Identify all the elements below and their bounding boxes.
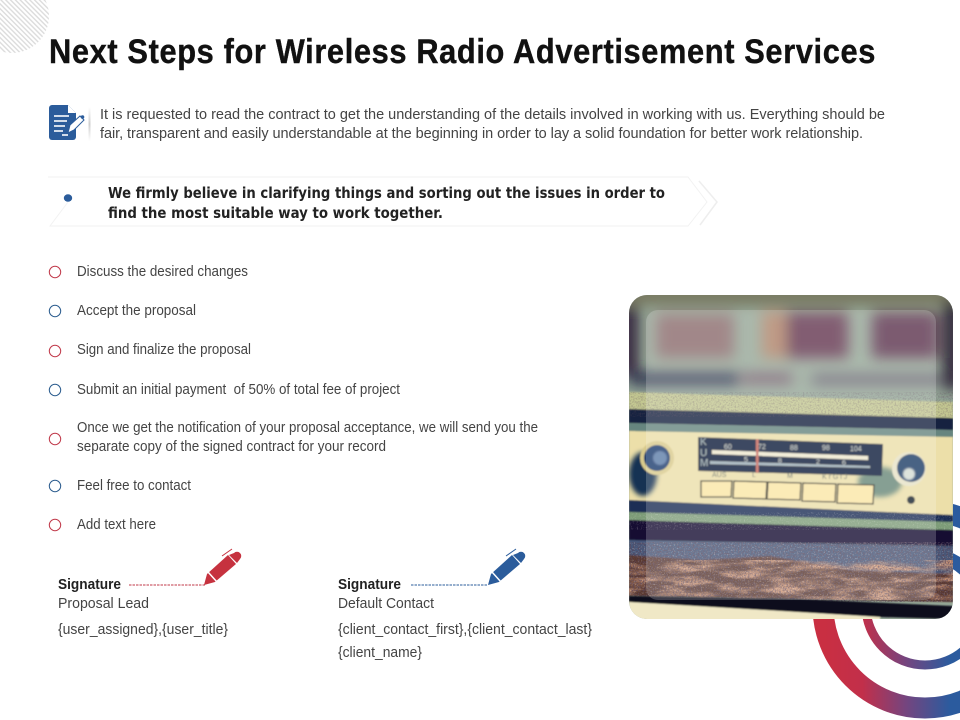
item 5: Once we get the notification of your proposal acceptance, we will send you the (77, 419, 538, 436)
tuner dial: 88 (790, 445, 798, 452)
tuner dial: 5 (744, 457, 748, 464)
callout banner (48, 177, 717, 226)
icon: blue pen (488, 549, 525, 585)
decorative hatched circle (0, 0, 49, 53)
item 4: Submit an initial payment of 50% of total fee of project (77, 381, 401, 398)
banner text: We firmly believe in clarifying things and sorting out the issues in order to (108, 184, 665, 202)
signature block: default contact: Default Contact (338, 595, 435, 612)
photo: vintage car radio: AUS (712, 472, 727, 479)
title: Next Steps for Wireless Radio Advertisement Services (49, 33, 876, 71)
cream faceplate (629, 431, 953, 516)
pale green band (629, 392, 953, 420)
photo translucent overlay (646, 310, 936, 600)
item 7: Add text here (77, 516, 156, 533)
tuner dial: 104 (850, 446, 862, 453)
item 3: Sign and finalize the proposal (77, 341, 251, 358)
dashed line red (129, 584, 205, 586)
intro paragraph: It is requested to read the contract to get the understanding of the details involved in working with us. Everything should be (100, 107, 885, 123)
concentric gradient rings (823, 504, 960, 715)
divider (88, 107, 90, 141)
photo: vintage car radio: M (787, 473, 793, 480)
banner text (108, 184, 665, 222)
item 2: Accept the proposal (77, 302, 196, 319)
signature block: proposal lead: Proposal Lead (58, 595, 149, 612)
signature block: default contact: {client_contact_first},{client_contact_last} (338, 621, 592, 638)
item 1: Discuss the desired changes (77, 263, 248, 280)
banner text: find the most suitable way to work together. (108, 204, 443, 222)
item 7 (49, 516, 156, 533)
black lower edge and cream base (629, 596, 953, 622)
photo: vintage car radio: L (752, 472, 756, 479)
tuner dial: K (700, 437, 707, 448)
dashed line blue (411, 584, 488, 586)
signature block: default contact: Signature (338, 576, 401, 593)
blurred background (620, 285, 960, 390)
lower bands (629, 499, 953, 523)
dark navy band (629, 409, 953, 430)
banner outline (48, 177, 707, 226)
rust texture (629, 392, 953, 602)
item 5: separate copy of the signed contract for your record (77, 438, 386, 455)
checklist (49, 263, 538, 533)
right knob (892, 452, 926, 504)
tuner dial: 8 (778, 458, 782, 465)
tuner dial: 60 (724, 444, 732, 451)
signature block: default contact (338, 549, 592, 661)
tuner dial: U (700, 448, 707, 459)
signature block: proposal lead: {user_assigned},{user_title} (58, 621, 228, 638)
intro paragraph: fair, transparent and easily understandable at the beginning in order to lay a solid foundation for better work relationship. (100, 126, 863, 142)
photo: vintage car radio (620, 285, 960, 622)
icon: red pen (204, 549, 241, 585)
signature block: proposal lead: Signature (58, 576, 121, 593)
intro paragraph (100, 107, 885, 142)
tuner dial: 72 (758, 444, 766, 451)
tuner dial: 2 (816, 459, 820, 466)
tuner dial (698, 437, 883, 476)
signature block: default contact: {client_name} (338, 644, 422, 661)
tuner dial: 98 (822, 445, 830, 452)
radio push buttons (701, 481, 874, 504)
icon: document with pencil (49, 105, 84, 140)
tuner dial: M (700, 458, 708, 469)
banner bullet (64, 194, 72, 202)
signature block: proposal lead (58, 549, 241, 638)
item 5 (49, 419, 538, 455)
left knob (640, 441, 674, 475)
item 6: Feel free to contact (77, 477, 192, 494)
photo: vintage car radio: K r G ι J (822, 474, 847, 481)
tuner dial: 6 (842, 460, 846, 467)
banner chevron (699, 181, 717, 225)
